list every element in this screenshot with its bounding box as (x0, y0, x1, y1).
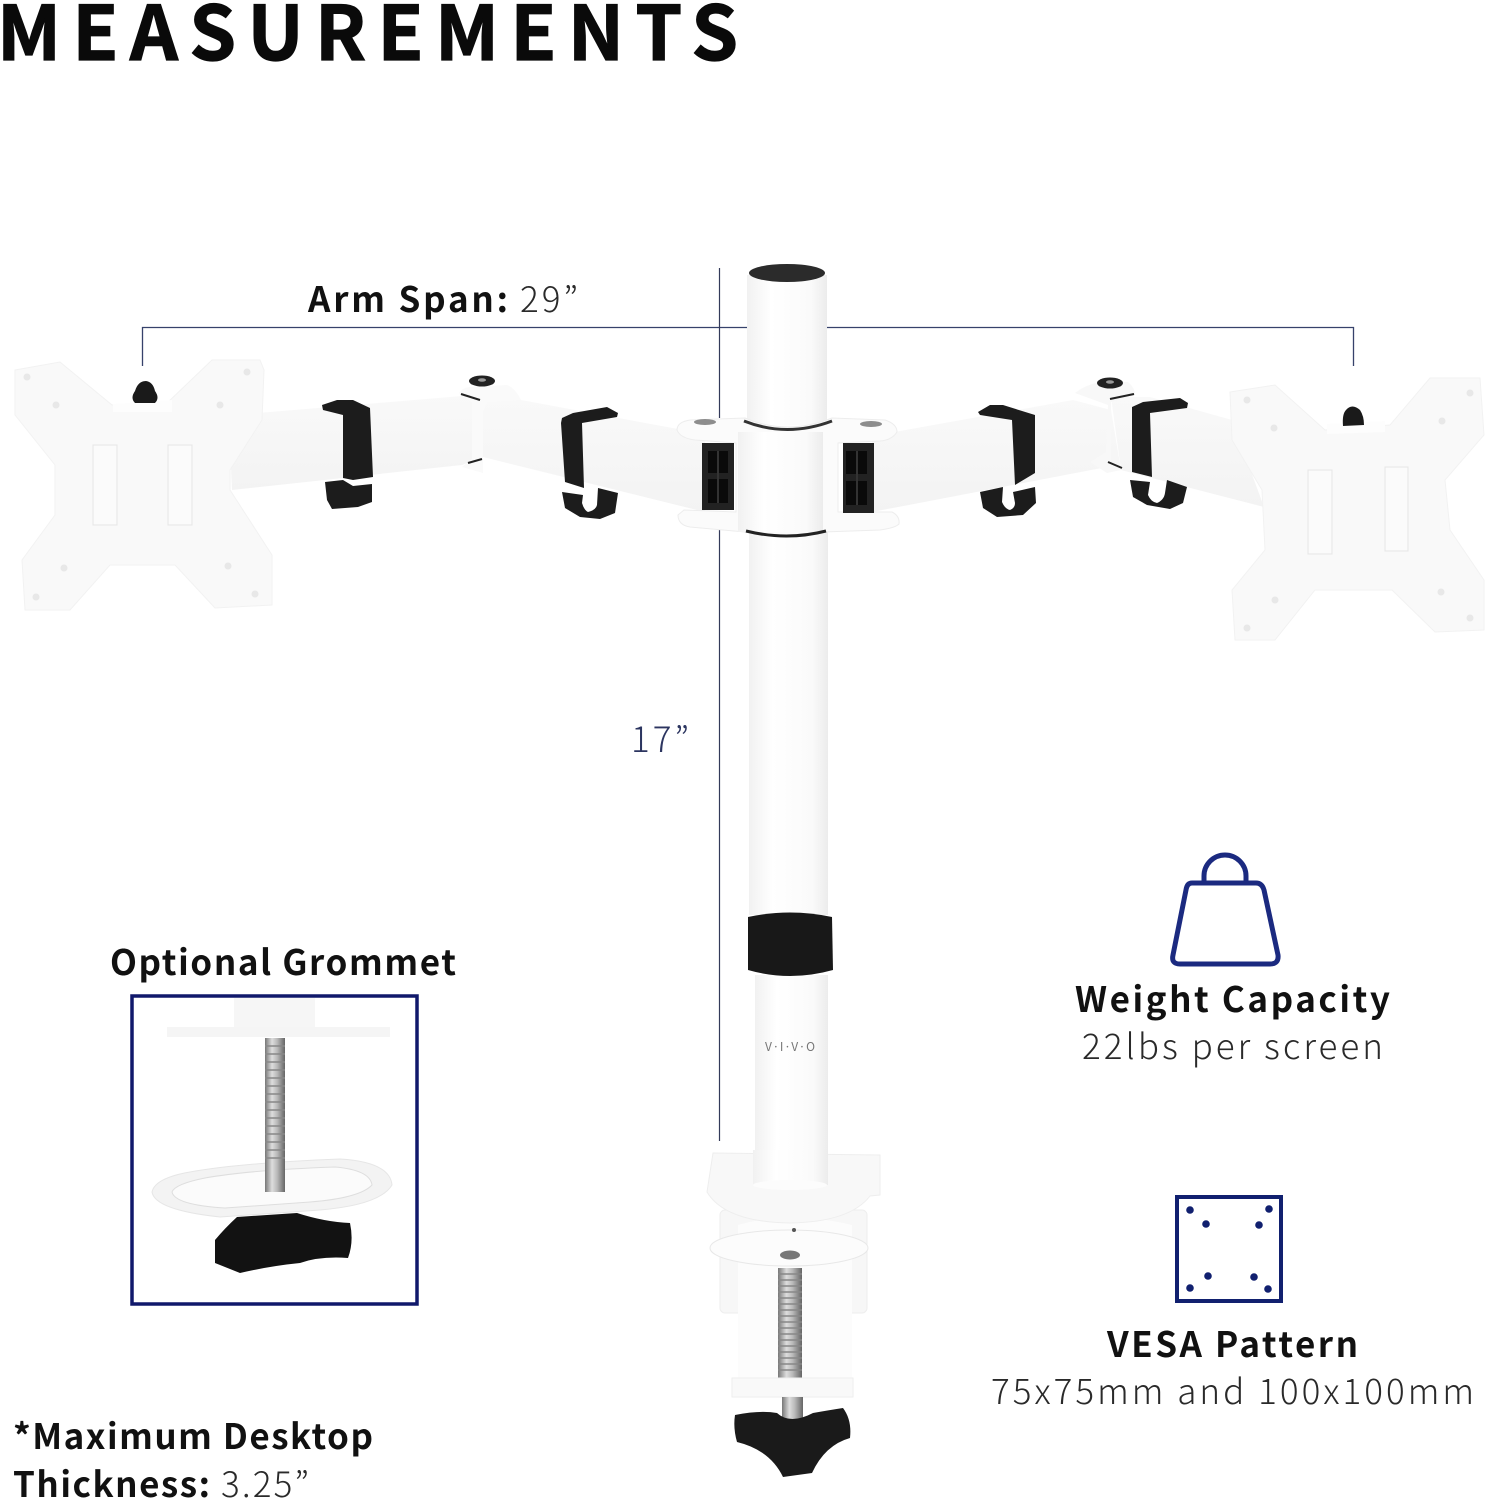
right socket (843, 443, 874, 513)
right monitor plate (1230, 378, 1484, 640)
height dimension line (718, 268, 720, 1141)
cable clips (322, 398, 1188, 519)
weight capacity text (1075, 972, 1390, 1070)
arm span label: 29” (520, 272, 578, 323)
weight capacity text: 22lbs per screen (1082, 1019, 1383, 1070)
desktop thickness note (13, 1409, 373, 1500)
monitor arm product (15, 264, 1484, 1477)
panel: grommet (132, 996, 417, 1304)
left monitor plate (15, 360, 272, 610)
arm span label: Arm Span: (307, 272, 508, 323)
height label: 17” (631, 712, 689, 763)
pole: V·I·V·O (765, 1038, 815, 1055)
VESA pattern text: 75x75mm and 100x100mm (991, 1364, 1474, 1415)
VESA pattern text (991, 1317, 1474, 1415)
pole (747, 264, 833, 1190)
desktop thickness note: *Maximum Desktop (13, 1409, 373, 1460)
icon: VESA pattern (1177, 1197, 1281, 1301)
right arm (872, 378, 1264, 512)
icon: weight (1173, 855, 1278, 964)
VESA pattern text: VESA Pattern (1106, 1317, 1358, 1368)
right clip one (978, 405, 1036, 517)
left socket (702, 443, 734, 510)
right clip two (1130, 398, 1188, 509)
left arm (230, 376, 705, 512)
left clip one (322, 400, 373, 509)
arm span dimension line (142, 328, 1354, 366)
grommet heading: Optional Grommet (110, 935, 456, 986)
desk clamp (707, 1150, 880, 1477)
weight capacity text: Weight Capacity (1075, 972, 1390, 1023)
hub (677, 418, 899, 536)
left clip two (561, 407, 618, 519)
